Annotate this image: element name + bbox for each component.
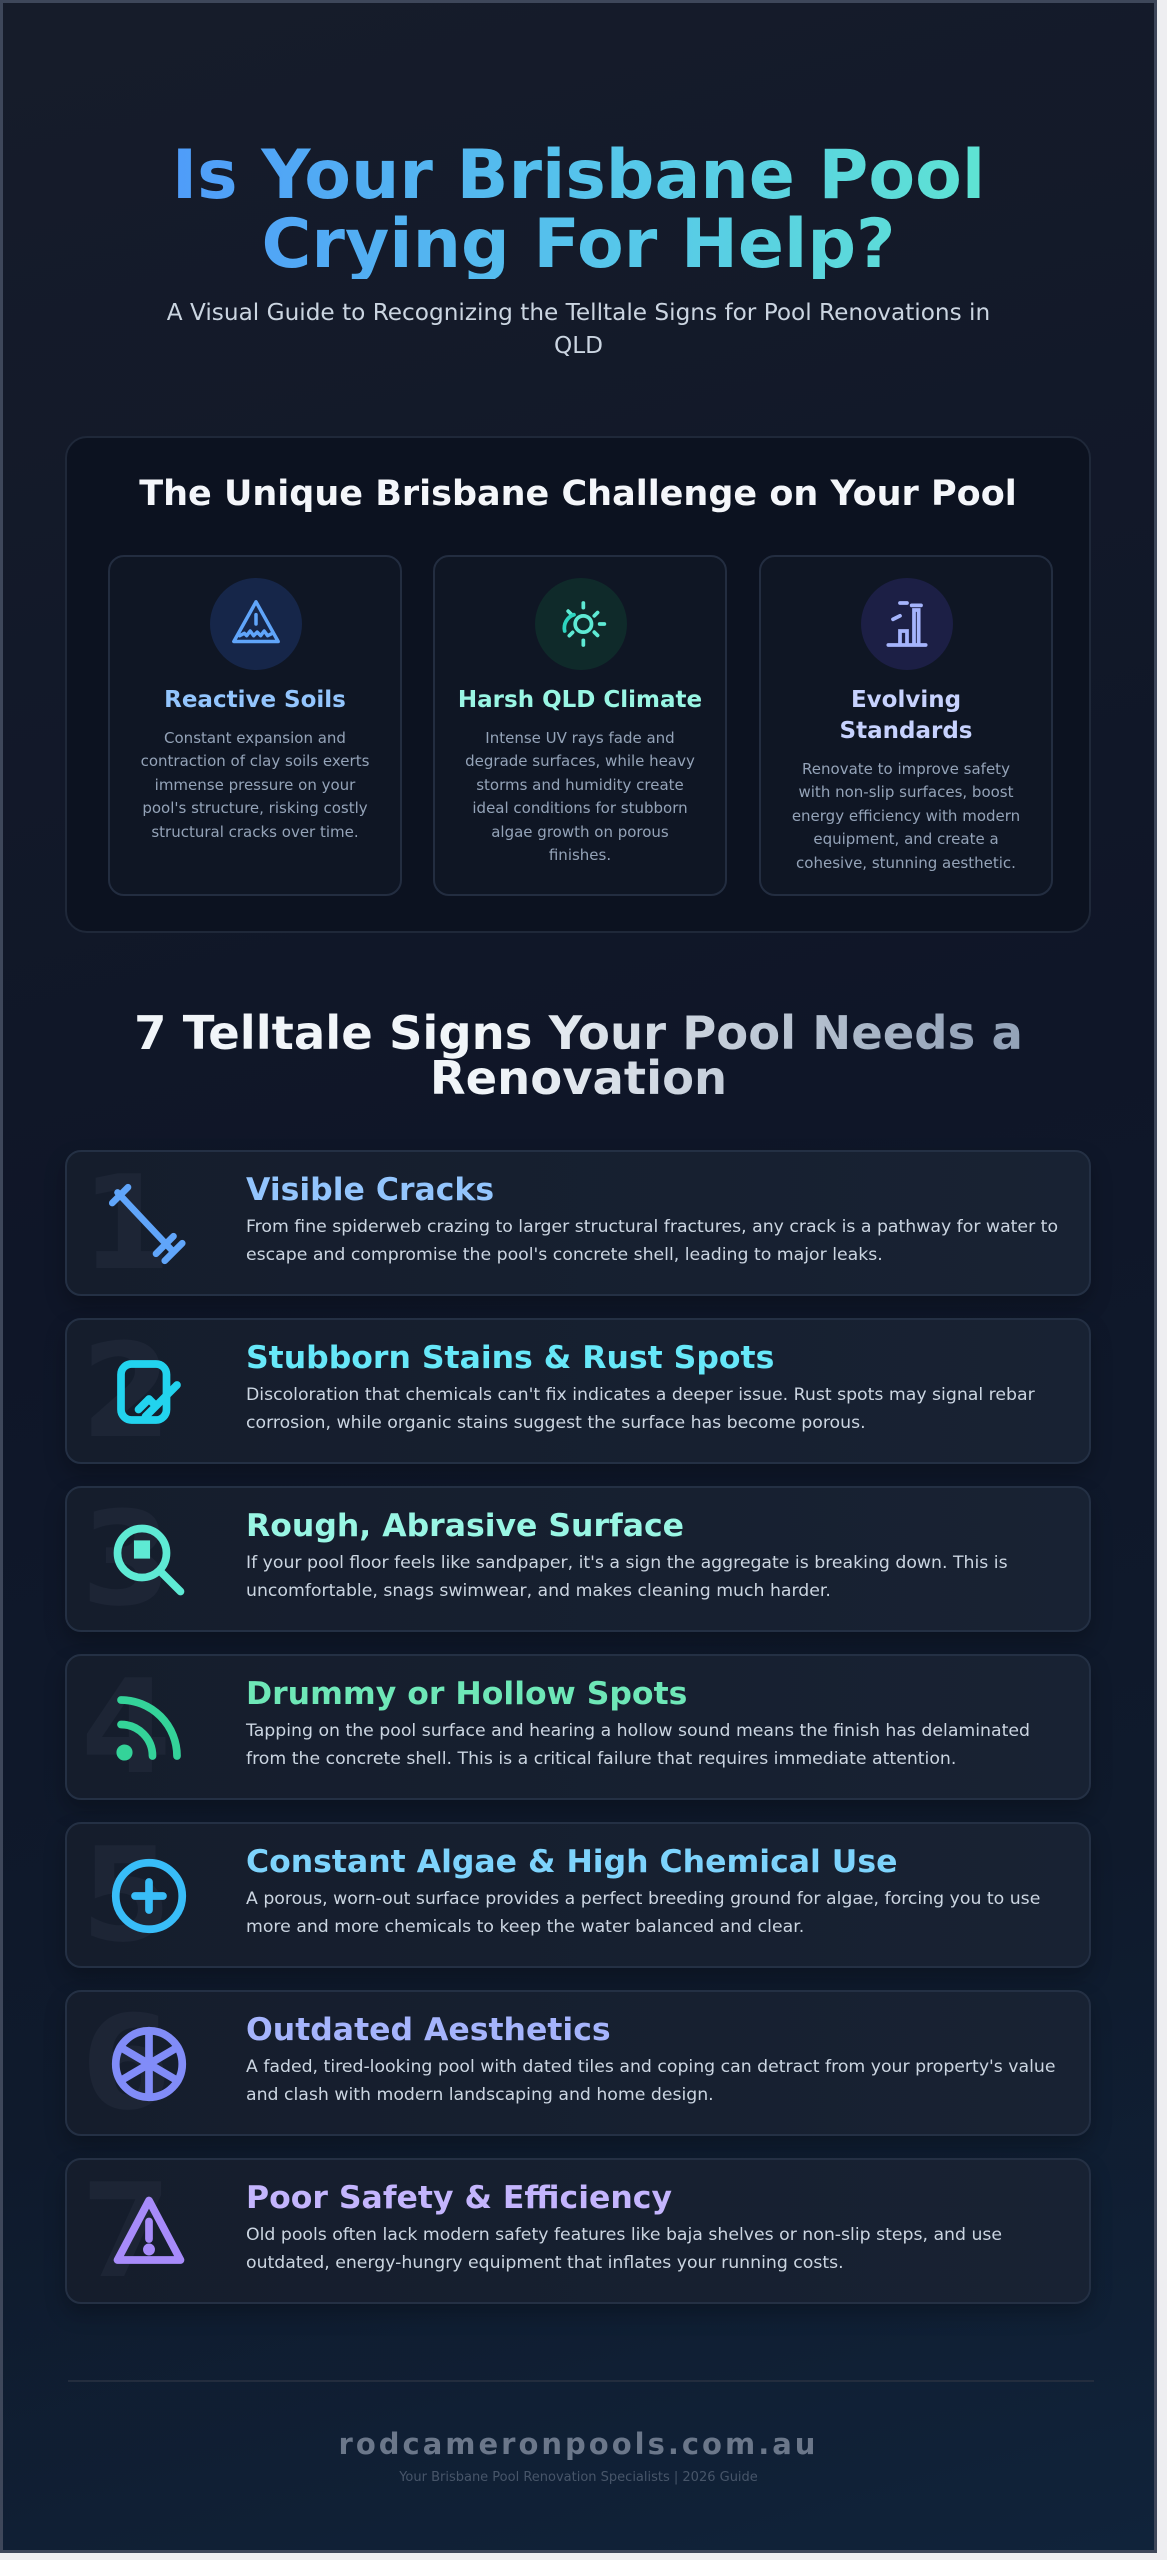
sign 2: 2 [81,1315,171,1467]
sign 4: 4 [81,1651,171,1803]
sign 2 [65,1318,1091,1464]
sign 5: A porous, worn-out surface provides a perfect breeding ground for algae, forcing you to use more and more chemicals to keep the water balanced and clear. [246,1889,1040,1937]
icon: wheel [112,2026,186,2102]
icon: crack [109,1184,186,1264]
icon: warning soil [210,578,302,670]
footer domain: rodcameronpools.com.au [339,2427,818,2461]
icon: warning [114,2196,184,2264]
card: reactive soils: Constant expansion and contraction of clay soils exerts immense pressure on your pool's structure, risking costly structural cracks over time. [141,729,369,841]
sign 3: 3 [81,1483,171,1635]
icon: stain [117,1360,181,1424]
card: evolving standards [759,555,1053,896]
icon: building [861,578,953,670]
card: reactive soils: Reactive Soils [164,687,346,713]
sign 1: Visible Cracks [246,1172,494,1208]
sign 3: Rough, Abrasive Surface [246,1508,684,1544]
card: harsh climate: Intense UV rays fade and degrade surfaces, while heavy storms and humidity create ideal conditions for stubborn algae growth on porous finishes. [465,729,695,864]
subtitle: A Visual Guide to Recognizing the Telltale Signs for Pool Renovations in QLD [167,299,990,359]
sign 5 [65,1822,1091,1968]
card: harsh climate [433,555,727,896]
card: reactive soils [108,555,402,896]
footer tagline: Your Brisbane Pool Renovation Specialists | 2026 Guide [399,2470,758,2485]
title [172,136,985,284]
icon: sun [535,578,627,670]
card: harsh climate: Harsh QLD Climate [458,687,702,713]
title: Is Your Brisbane Pool [172,136,985,215]
sign 2: Stubborn Stains & Rust Spots [246,1340,774,1376]
panel: Brisbane challenge [65,436,1091,933]
sign 3: If your pool floor feels like sandpaper, it's a sign the aggregate is breaking down. This is uncomfortable, snags swimwear, and makes cleaning much harder. [246,1553,1008,1601]
panel heading: The Unique Brisbane Challenge on Your Pool [139,474,1017,514]
card: evolving standards: Evolving [851,687,961,713]
icon: plus circle [112,1858,186,1934]
section heading: 7 Telltale Signs Your Pool Needs a [134,1006,1023,1060]
card: evolving standards: Renovate to improve safety with non-slip surfaces, boost energy efficiency with modern equipment, and create a cohesive, stunning aesthetic. [792,760,1020,872]
sign 2: Discoloration that chemicals can't fix indicates a deeper issue. Rust spots may signal rebar corrosion, while organic stains suggest the surface has become porous. [246,1385,1035,1433]
sign 6: 6 [81,1987,171,2139]
card: evolving standards: Standards [840,718,972,744]
sign 7: 7 [81,2155,171,2307]
sign 6 [65,1990,1091,2136]
sign 6: Outdated Aesthetics [246,2012,611,2048]
section heading: Renovation [430,1051,727,1105]
icon: magnifier [114,1524,184,1596]
sign 1: 1 [81,1147,171,1299]
sign 1: From fine spiderweb crazing to larger structural fractures, any crack is a pathway for water to escape and compromise the pool's concrete shell, leading to major leaks. [246,1217,1058,1265]
sign 4: Tapping on the pool surface and hearing a hollow sound means the finish has delaminated from the concrete shell. This is a critical failure that requires immediate attention. [246,1721,1030,1769]
sign 5: Constant Algae & High Chemical Use [246,1844,897,1880]
icon: sound waves [116,1696,181,1760]
sign 7 [65,2158,1091,2304]
sign 5: 5 [81,1819,171,1971]
sign 4: Drummy or Hollow Spots [246,1676,687,1712]
section heading [134,1006,1023,1105]
sign 7: Old pools often lack modern safety features like baja shelves or non-slip steps, and use outdated, energy-hungry equipment that inflates your running costs. [246,2225,1002,2273]
sign 3 [65,1486,1091,1632]
sign 1 [65,1150,1091,1296]
sign 6: A faded, tired-looking pool with dated tiles and coping can detract from your property's value and clash with modern landscaping and home design. [246,2057,1056,2105]
sign 4 [65,1654,1091,1800]
sign 7: Poor Safety & Efficiency [246,2180,672,2216]
title: Crying For Help? [262,205,895,284]
